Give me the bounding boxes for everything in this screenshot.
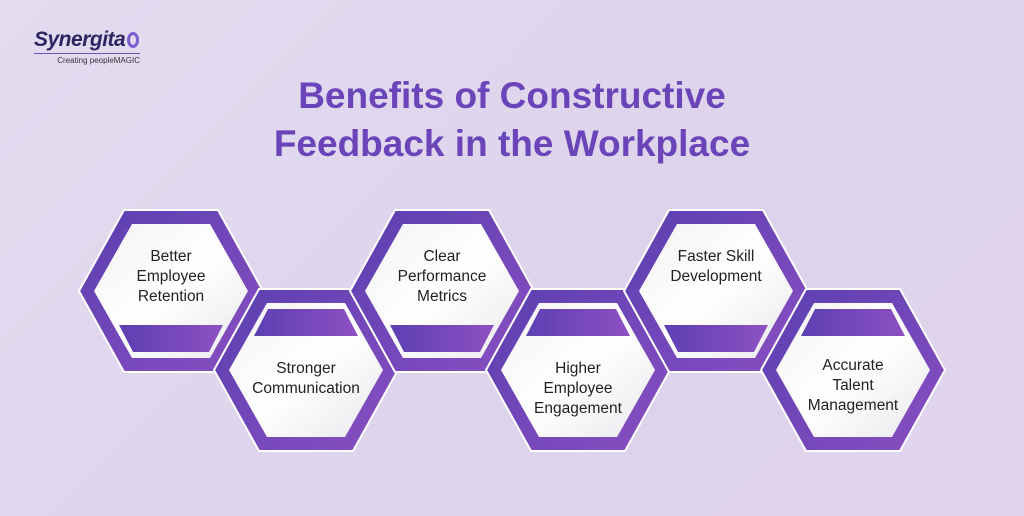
title: Feedback in the Workplace (274, 123, 750, 164)
hex 4: Higher Employee Engagement: Engagement (534, 400, 623, 417)
hex 2: Stronger Communication (214, 289, 398, 451)
hex 2: Stronger Communication: Stronger (276, 360, 336, 377)
hex 5: Faster Skill Development: Faster Skill (678, 248, 754, 265)
hex 4: Higher Employee Engagement: Employee (544, 380, 612, 397)
hex 3: Clear Performance Metrics: Metrics (417, 288, 467, 305)
hex 6: Accurate Talent Management: Management (808, 397, 899, 414)
hex 6: Accurate Talent Management: Accurate (822, 357, 884, 374)
hex 6: Accurate Talent Management (761, 289, 945, 451)
hex 4: Higher Employee Engagement: Higher (555, 360, 601, 377)
hex 1: Better Employee Retention: Employee (137, 268, 205, 285)
hex 1: Better Employee Retention: Better (150, 248, 192, 265)
hex 3: Clear Performance Metrics (350, 210, 534, 372)
hex 2: Stronger Communication: Communication (252, 380, 360, 397)
logo: Synergita (34, 28, 125, 51)
hex 5: Faster Skill Development (624, 210, 808, 372)
hex 3: Clear Performance Metrics: Performance (398, 268, 486, 285)
hex 1: Better Employee Retention (79, 210, 263, 372)
hex 4: Higher Employee Engagement (486, 289, 670, 451)
hex 6: Accurate Talent Management: Talent (832, 377, 874, 394)
hex 5: Faster Skill Development: Development (670, 268, 762, 285)
title (274, 75, 750, 164)
title: Benefits of Constructive (298, 75, 726, 116)
hex 3: Clear Performance Metrics: Clear (423, 248, 461, 265)
logo: Creating peopleMAGIC (57, 56, 140, 65)
logo (34, 28, 140, 65)
hex 1: Better Employee Retention: Retention (138, 288, 204, 305)
